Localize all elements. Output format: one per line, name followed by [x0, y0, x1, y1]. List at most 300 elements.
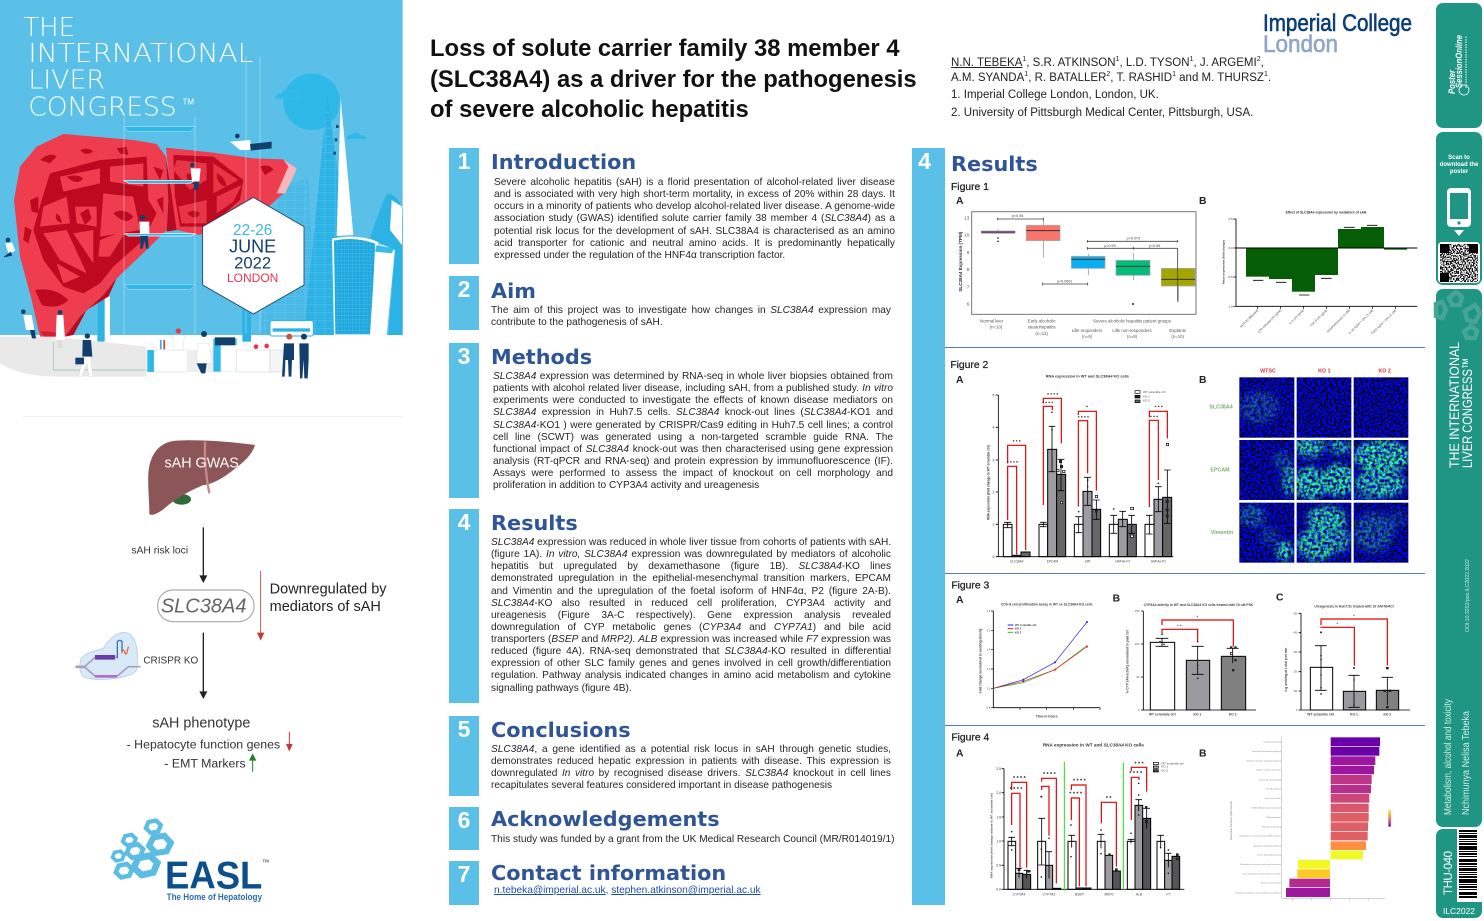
methods text: functional impact of SLC38A4 knock-out was then characterised using gene expression	[493, 444, 893, 455]
congress name: THE	[23, 12, 75, 42]
methods text: proliferation in addition to CYP3A4 activity and ureagenesis	[493, 480, 759, 491]
Imperial College logo	[1263, 10, 1412, 58]
number 7: 7	[458, 861, 470, 887]
panel A bar chart: * * * *	[1078, 415, 1089, 420]
panel: poster session online: SessionOnline	[1454, 34, 1465, 88]
label A: A	[956, 749, 964, 760]
panel A bar chart: * * * *	[1047, 392, 1058, 397]
panel C bar chart: 100	[1293, 691, 1298, 693]
panel A bar chart: HNF4a-P2	[1151, 559, 1166, 563]
intro text: expressed under the regulation of the HNF4α transcription factor.	[494, 250, 785, 261]
results text: downregulation of CYP metabolic genes (CYP3A4 and CYP7A1) and bile acid	[491, 622, 891, 633]
number 4	[449, 509, 479, 703]
section: conclusions	[449, 716, 891, 796]
panel B microscopy: EPCAM	[1210, 467, 1230, 473]
panel C bar chart: 0	[1296, 710, 1298, 712]
panel A line chart	[978, 603, 1100, 719]
aim text: The aim of this project was to investigate how changes in SLC38A4 expression may	[491, 305, 891, 316]
number 6	[449, 807, 479, 850]
panel A bar chart: * * *	[1155, 405, 1163, 410]
results text: reduced (figure 4A). RNA-seq demonstrated that SLC38A4-KO resulted in differential	[491, 646, 891, 657]
panel A bar chart: 5	[992, 393, 994, 397]
methods text	[493, 371, 893, 491]
panel A boxplot: Early alcoholic	[1028, 319, 1056, 324]
panel B bar chart: TGFβ ng/ml + Dex (1 uM)	[1370, 309, 1397, 336]
right results bar	[912, 148, 945, 905]
study schematic	[75, 440, 387, 902]
panel B bar chart: * *	[1177, 624, 1182, 629]
arrow: downregulated: mediators of sAH	[270, 599, 381, 615]
panel A boxplot: p=0.55	[1012, 214, 1023, 218]
panel A bar chart: RNA expression (fold change relative to WT scramble ctrl)	[990, 793, 994, 878]
label B: B	[1113, 594, 1120, 605]
panel A bar chart: CYP3A4	[1013, 892, 1026, 896]
number 1: 1	[458, 148, 470, 174]
panel A bar chart: HNF4a-P1	[1115, 559, 1130, 563]
phenotype: - EMT Markers	[164, 757, 246, 771]
section: aim	[449, 276, 891, 330]
panel B bar chart	[1126, 603, 1256, 717]
panel A bar chart: RNA expression (fold change to WT scramble ctrl)	[987, 445, 991, 520]
panel B microscopy: SLC38A4	[1209, 405, 1233, 411]
panel A boxplot: 13	[964, 215, 970, 220]
methods text: cell line (SCWT) was generated using a non-targeted scramble guide RNA. The	[493, 432, 893, 443]
results heading: Results	[951, 152, 1038, 176]
congress name	[23, 12, 253, 121]
methods text: experiments were conducted to investigate the effects of known disease mediators on	[493, 395, 893, 406]
city skyline	[97, 73, 403, 342]
panel C bar chart: Ureagenesis in Huh7.5s treated with 10 mM NH4Cl	[1314, 604, 1394, 608]
results text: ureagenesis (Figure 3A-C respectively). Gene expression analysis revealed	[491, 610, 891, 621]
panel A boxplot: Explants	[1169, 328, 1186, 333]
heading: Results	[491, 511, 578, 535]
panel: poster number	[1436, 829, 1482, 918]
panel A bar chart: 2	[992, 490, 994, 494]
panel: poster session online	[1436, 3, 1482, 128]
panel A bar chart: RNA expression in WT and SLC38A4 KO cells	[1046, 374, 1129, 378]
icon: liver: sAH GWAS	[165, 456, 239, 472]
EASL logo: TM	[262, 858, 269, 863]
panel B bar chart: % CYP 3A4 activity normalised to pwd ctrl	[1126, 630, 1130, 693]
number 2: 2	[458, 276, 470, 302]
panel: download the poster: poster	[1450, 169, 1469, 175]
results text: signalling pathways (figure 4B).	[491, 682, 632, 694]
section: contact	[449, 861, 761, 905]
results text: transporters (BSEP and MRP2). ALB expression was increased while F7 expression was	[491, 634, 891, 645]
methods text: SLC38A4 expression was determined by RNA-seq in whole liver biopsies obtained from	[493, 371, 893, 382]
results text: (figure 1A). In vitro, SLC38A4 expression was downregulated by mediators of alcoholic	[491, 549, 891, 560]
panel A bar chart: MRP2	[1104, 892, 1114, 896]
panel: poster session online: Poster	[1447, 69, 1458, 94]
results text: demonstrated upregulation in the epithelial-mesenchymal transition markers, EPCAM	[491, 573, 891, 584]
panel: download the poster: download the	[1440, 162, 1479, 168]
panel C bar chart: *	[1353, 613, 1355, 618]
date hexagon: 2022	[234, 253, 271, 272]
heading: Acknowledgements	[491, 807, 720, 831]
label B: B	[1199, 749, 1206, 760]
panel A bar chart: * * * *	[1129, 771, 1143, 777]
panel B pathway chart: Notch signaling pathway	[1258, 854, 1282, 857]
panel B bar chart: 0.0	[1228, 246, 1233, 250]
panel A boxplot: SLC38A4 Expression (TPM)	[958, 231, 963, 292]
panel B bar chart: NOTCH (Blocked)	[1239, 309, 1259, 328]
panel A boxplot: 7	[967, 284, 970, 289]
panel A boxplot: p<0.0001	[1057, 279, 1072, 283]
panel A boxplot: (n=8)	[1127, 334, 1138, 339]
divider	[945, 725, 1425, 726]
shelves	[124, 57, 260, 335]
divider	[945, 347, 1425, 348]
panel A boxplot	[958, 212, 1196, 339]
panel B bar chart: Mean expression (fold change)	[1222, 240, 1226, 284]
panel B pathway chart: Metabolism of amino acids and derivatives	[1240, 863, 1281, 866]
arrow: CRISPR KO: CRISPR KO	[143, 655, 199, 666]
laboratory	[0, 337, 285, 377]
panel B pathway chart: NF-kB pathway	[1266, 788, 1282, 791]
panel B bar chart: 100	[1135, 642, 1140, 646]
results text	[491, 537, 891, 694]
panel B pathway chart: Reactome Pathway (NES sorted)	[1229, 801, 1233, 840]
panel B pathway chart: Toll-like receptor cascades	[1256, 769, 1281, 772]
EASL logo: The Home of Hepatology	[167, 892, 262, 902]
panel A bar chart: KO 2	[1143, 399, 1150, 403]
arrow: risk loci	[131, 527, 207, 583]
panel A bar chart: * * * *	[1013, 776, 1027, 782]
number 1	[449, 148, 479, 264]
label B: B	[1199, 375, 1206, 386]
poster title: Loss of solute carrier family 38 member 4	[430, 35, 900, 62]
poster title: (SLC38A4) as a driver for the pathogenesis	[430, 66, 917, 92]
figure 2 heading: Figure 2	[950, 360, 988, 371]
panel A bar chart: KO 1	[1161, 765, 1169, 769]
panel B bar chart: 0	[1138, 708, 1140, 712]
panel B pathway chart: Biological oxidations and xenobiotic metabolism	[1235, 891, 1281, 894]
sidebar	[1434, 3, 1483, 918]
panel A boxplot: 10	[964, 233, 970, 238]
panel A boxplot: p=0.079	[1127, 237, 1140, 241]
date hexagon: JUNE	[229, 236, 276, 256]
panel: congress sidebar: Metabolism, alcohol and toxicity	[1442, 698, 1454, 815]
congress name: TM	[183, 98, 195, 107]
panel B pathway chart: Amino acid transport	[1261, 882, 1281, 885]
panel C bar chart: 300	[1293, 652, 1298, 654]
panel: poster number: ILC2022	[1443, 906, 1475, 916]
panel B microscopy	[1209, 369, 1410, 563]
panel A line chart: 1.2	[987, 669, 991, 671]
section: introduction	[449, 148, 895, 264]
panel B bar chart: WT scramble ctrl	[1149, 713, 1176, 717]
heading: Conclusions	[491, 718, 631, 742]
panel A bar chart: 0.5	[996, 864, 1001, 868]
label C: C	[1276, 592, 1284, 603]
panel: congress sidebar: DOI:10.3252/pos.ILC2022.2022	[1465, 559, 1471, 632]
panel A bar chart	[987, 374, 1173, 563]
panel B bar chart: CYP3A4 activity in WT and SLC38A4 KO cells treated with 10 uM FSK	[1144, 603, 1254, 607]
arrow: downregulated	[257, 571, 387, 641]
section: methods	[449, 343, 893, 498]
figure 4 heading: Figure 4	[951, 732, 989, 743]
giant liver	[9, 134, 297, 354]
panel A bar chart	[990, 743, 1184, 896]
panel A line chart: 1.0	[987, 688, 991, 690]
panel A bar chart: * * * *	[1010, 787, 1023, 793]
intro text	[494, 177, 895, 261]
authors and affiliations: A.M. SYANDA1, R. BATALLER2, T. RASHID1 and M. THURSZ1.	[951, 71, 1271, 84]
label A: A	[956, 595, 964, 606]
panel B bar chart: KO 1	[1193, 713, 1201, 717]
figure 4	[951, 732, 1392, 900]
number 7	[449, 861, 479, 905]
panel A bar chart: SLC38A4	[1010, 559, 1024, 563]
panel A boxplot: Lille non-responders	[1112, 328, 1152, 333]
date hexagon: 22-26	[233, 222, 272, 239]
figure 3	[951, 580, 1410, 719]
panel A bar chart: 1.0	[996, 839, 1001, 843]
panel A bar chart: VIM	[1085, 559, 1091, 563]
panel A boxplot: 6	[967, 302, 970, 307]
panel A bar chart: 1.5	[996, 815, 1001, 819]
panel C bar chart: 200	[1293, 672, 1298, 674]
figure 1 heading: Figure 1	[951, 182, 989, 193]
gene pill	[158, 590, 254, 622]
contact links: n.tebeka@imperial.ac.uk, stephen.atkinson@imperial.ac.uk	[494, 885, 761, 896]
panel C bar chart	[1284, 604, 1410, 717]
number 2	[449, 276, 479, 330]
figure 2	[950, 360, 1408, 563]
panel C bar chart: 500	[1293, 613, 1298, 615]
conclusions text	[491, 744, 891, 791]
panel A boxplot: steatohepatitis	[1028, 325, 1056, 330]
conclusions text: demonstrates reduced hepatic expression in patients with disease. This expression is	[491, 756, 891, 767]
panel A bar chart: EPCAM	[1047, 559, 1058, 563]
acknowledgement text: This study was funded by a grant from the UK Medical Research Council (MR/R014019/1)	[491, 834, 894, 845]
panel A bar chart: 2.0	[996, 791, 1001, 795]
number 6: 6	[458, 807, 470, 833]
aim text	[491, 305, 891, 328]
panel A boxplot: (n=9)	[1082, 334, 1093, 339]
icon: liver	[148, 440, 255, 515]
panel B bar chart: 150	[1135, 609, 1140, 613]
panel: poster number: THU-040	[1443, 851, 1455, 895]
panel B bar chart: IL-6 (10 ng/ml)	[1288, 309, 1305, 325]
figure 3 heading: Figure 3	[951, 581, 989, 592]
panel B pathway chart: TNF-alpha signaling	[1262, 826, 1282, 828]
panel A bar chart: 0.0	[996, 888, 1001, 892]
panel B pathway chart: DNA replication	[1266, 816, 1282, 819]
methods text: patients with alcohol related liver disease, including sAH, from a published study. In vitro	[493, 383, 893, 394]
phenotype: - Hepatocyte function genes	[127, 737, 280, 751]
methods text: SLC38A4 expression in Huh7.5 cells. SLC38A4 knock-out lines (SLC38A4-KO1 and	[493, 407, 893, 418]
panel A bar chart: * *	[1106, 796, 1112, 802]
panel: congress sidebar: Nchimunya Nelisa Tebeka	[1460, 711, 1472, 815]
panel B bar chart: Dexamethasone (1 uM)	[1326, 309, 1351, 334]
panel B pathway chart: Regulation of cell growth and differentiation	[1240, 835, 1282, 838]
panel A bar chart: 1	[992, 523, 994, 527]
heading: Introduction	[491, 150, 636, 174]
poster title: of severe alcoholic hepatitis	[430, 96, 749, 123]
phenotype	[127, 716, 293, 772]
panel A bar chart: *	[1086, 405, 1088, 410]
heading: Methods	[491, 345, 592, 369]
section: results summary	[449, 509, 891, 703]
number 4: 4	[458, 509, 470, 535]
arrow: CRISPR KO	[143, 633, 207, 699]
results text: SLC38A4 expression was reduced in whole liver tissue from cohorts of patients with sAH.	[491, 537, 891, 548]
panel B bar chart: Effect of SLC38A4 expression by mediators of sAH	[1286, 211, 1367, 215]
authors and affiliations: 1. Imperial College London, London, UK.	[951, 89, 1159, 101]
number 5	[449, 716, 479, 796]
panel A line chart: Time in hours	[1036, 715, 1058, 719]
label B: B	[1199, 196, 1206, 207]
results text: expression of other SLC family genes and genes involved in cell growth/differentiation	[491, 658, 891, 669]
panel A boxplot: p=0.99	[1104, 244, 1116, 248]
panel A bar chart: KO 2	[1161, 768, 1169, 772]
intro text: occurs in a minority of patients who develop alcohol-related liver disease. A genome-wide	[494, 201, 895, 212]
panel A bar chart: RNA expression in WT and SLC38A4 KO cells	[1043, 743, 1144, 748]
panel A line chart: WT scramble ctrl	[1015, 623, 1037, 627]
panel A bar chart: * * * *	[1043, 772, 1057, 778]
date hexagon: LONDON	[227, 271, 278, 285]
panel B microscopy: KO 2	[1378, 369, 1391, 375]
number 3	[449, 343, 479, 498]
conclusions text: recapitulates several features considered important in disease pathogenesis	[491, 780, 832, 791]
panel A line chart: CCK-8 cell proliferation assay in WT vs SLC38A4 KO cells	[1001, 603, 1093, 607]
panel C bar chart: WT scramble ctrl	[1307, 713, 1334, 717]
panel C bar chart: KO 1	[1350, 713, 1358, 717]
panel: download the poster: Scan to	[1448, 155, 1470, 161]
right results bar: 4	[918, 148, 931, 174]
panel A bar chart: CYP7A1	[1043, 892, 1056, 896]
results text: and Vimentin and the upregulation of the foetal isoform of HNF4α, P2 (figure 2A-B).	[491, 586, 891, 596]
panel A line chart: 1.6	[987, 630, 991, 632]
Imperial College logo: London	[1263, 31, 1338, 58]
results text: regulation. Pathway analysis indicated changes in amino acid metabolism and cytokine	[491, 670, 891, 681]
panel A line chart: 1.4	[987, 650, 991, 652]
divider	[945, 573, 1425, 574]
panel B bar chart: IL-1β ng/ml + Dex (1 uM)	[1348, 309, 1374, 335]
intro text: acid transporter for cationic and neutral amino acids. It is predominantly hepatically	[494, 238, 895, 249]
panel B pathway chart: Cytokine signaling	[1264, 741, 1282, 744]
number 3: 3	[458, 343, 470, 369]
panel C bar chart: *	[1336, 622, 1338, 627]
panel A bar chart: * * * *	[1042, 401, 1053, 406]
conclusions text: downregulated In vitro by recognised disease drivers. SLC38A4 knockout in cell lines	[491, 768, 891, 779]
panel: congress sidebar	[1436, 289, 1482, 827]
intro text: Severe alcoholic hepatitis (sAH) is a florid presentation of alcohol-related liver disease	[494, 177, 895, 188]
heading: Contact information	[491, 861, 726, 885]
panel C bar chart: KO 2	[1383, 713, 1391, 717]
number 5: 5	[458, 716, 470, 742]
panel B pathway chart: G2/M DNA damage checkpoint	[1251, 807, 1281, 810]
panel: download the poster	[1436, 132, 1482, 285]
panel A bar chart: * * *	[1134, 762, 1145, 768]
panel A bar chart: * * *	[1013, 439, 1021, 444]
authors and affiliations: 2. University of Pittsburgh Medical Center, Pittsburgh, USA.	[951, 107, 1253, 119]
panel B pathway chart: Interferon gamma signaling pathway	[1246, 759, 1282, 762]
panel A bar chart: * * * *	[1073, 779, 1087, 785]
panel C bar chart: n-g urea/mg of t-otal prot min	[1284, 648, 1288, 692]
panel: congress sidebar: LIVER CONGRESS™	[1459, 358, 1475, 468]
scientists	[4, 134, 309, 378]
arrow: risk loci: sAH risk loci	[131, 546, 188, 557]
gene pill: SLC38A4	[161, 596, 246, 618]
authors and affiliations	[951, 56, 1271, 119]
panel A bar chart: ALB	[1135, 892, 1143, 896]
intro text: association study (GWAS) identified solute carrier family 38 member 4 (SLC38A4) as a	[494, 213, 895, 224]
methods text: analysis (RT-qPCR and RNA-seq) and protein expression by immunofluorescence (IF).	[493, 456, 893, 467]
aim text: contribute to the pathogenesis of sAH.	[491, 317, 663, 328]
panel A line chart: KO 2	[1015, 630, 1022, 634]
poster title	[430, 35, 917, 123]
panel B pathway chart: Interleukin-10 signaling	[1259, 778, 1282, 781]
panel A boxplot: (n=10)	[1171, 334, 1185, 339]
panel B bar chart: -0.5	[1227, 275, 1233, 279]
intro text: potential risk locus for the development of sAH. SLC38A4 is characterised as an amino	[494, 226, 895, 236]
panel B bar chart: LPS-Induced (10 ng/ml)	[1257, 309, 1282, 334]
panel A boxplot: (n=10)	[990, 325, 1003, 330]
icon: CRISPR	[75, 632, 141, 679]
panel B pathway chart: Interferon alpha/beta signaling	[1252, 750, 1282, 753]
panel A boxplot: 8	[967, 267, 970, 272]
panel: congress sidebar: THE INTERNATIONAL	[1446, 342, 1462, 468]
divider	[23, 416, 403, 417]
panel A bar chart: * * * *	[1069, 792, 1083, 798]
panel A bar chart: 4	[992, 426, 994, 430]
panel C bar chart: 400	[1293, 633, 1298, 635]
panel B microscopy: KO 1	[1318, 369, 1331, 375]
QR code	[1440, 244, 1478, 282]
panel B pathway chart	[1229, 736, 1391, 900]
panel A boxplot: Normal liver	[980, 319, 1004, 324]
panel A line chart: 1.8	[987, 611, 991, 613]
panel A line chart: 0.8	[987, 708, 991, 710]
results text: SLC38A4-KO also resulted in reduced cell proliferation, CYP3A4 activity and	[491, 598, 891, 609]
panel A bar chart: * * * *	[1007, 460, 1018, 465]
panel A bar chart: * * *	[1150, 415, 1158, 420]
label A: A	[956, 196, 964, 207]
panel A bar chart: 0	[992, 555, 994, 559]
arrow: downregulated: Downregulated by	[270, 582, 387, 598]
panel A bar chart: 2.5	[996, 767, 1001, 771]
panel A boxplot: p=0.65	[1149, 244, 1160, 248]
congress name: INTERNATIONAL	[28, 38, 253, 68]
panel A line chart: KO 1	[1015, 627, 1022, 631]
date hexagon	[203, 197, 304, 314]
label A: A	[956, 375, 964, 386]
panel A bar chart: BSEP	[1075, 892, 1085, 896]
panel B microscopy: WTSC	[1260, 369, 1276, 375]
panel A boxplot: Lille responders	[1072, 328, 1102, 333]
panel B pathway chart: SLC-mediated transmembrane transport	[1242, 872, 1281, 875]
intro text: and is associated with very high short-term mortality, in excess of 20% within 28 days. It	[494, 189, 895, 200]
panel B pathway chart: Apoptosis signaling pathway	[1254, 844, 1282, 847]
panel B bar chart: TGF-β (10 ng/ml)	[1309, 309, 1328, 328]
panel A boxplot: 9	[967, 250, 970, 255]
methods text: SLC38A4-KO1 ) were generated by CRISPR/Cas9 editing in Huh7.5 cell lines; a control	[493, 420, 893, 430]
panel A bar chart: KO 1	[1143, 394, 1150, 398]
panel B bar chart: 0.5	[1228, 217, 1233, 221]
panel B bar chart: 50	[1136, 675, 1140, 679]
panel A bar chart: WT scramble ctrl	[1161, 761, 1184, 765]
EASL logo	[112, 820, 269, 902]
figure 1	[951, 182, 1418, 339]
heading: Aim	[491, 279, 536, 303]
congress name: LIVER	[28, 64, 105, 94]
authors and affiliations: N.N. TEBEKA1, S.R. ATKINSON1, L.D. TYSON1, J. ARGEMI2,	[951, 56, 1264, 69]
panel B bar chart	[1222, 211, 1417, 336]
panel A bar chart: F7	[1166, 892, 1170, 896]
results text: hepatitis but upregulated by dexamethasone (figure 1B). SLC38A4-KO lines	[491, 561, 891, 572]
